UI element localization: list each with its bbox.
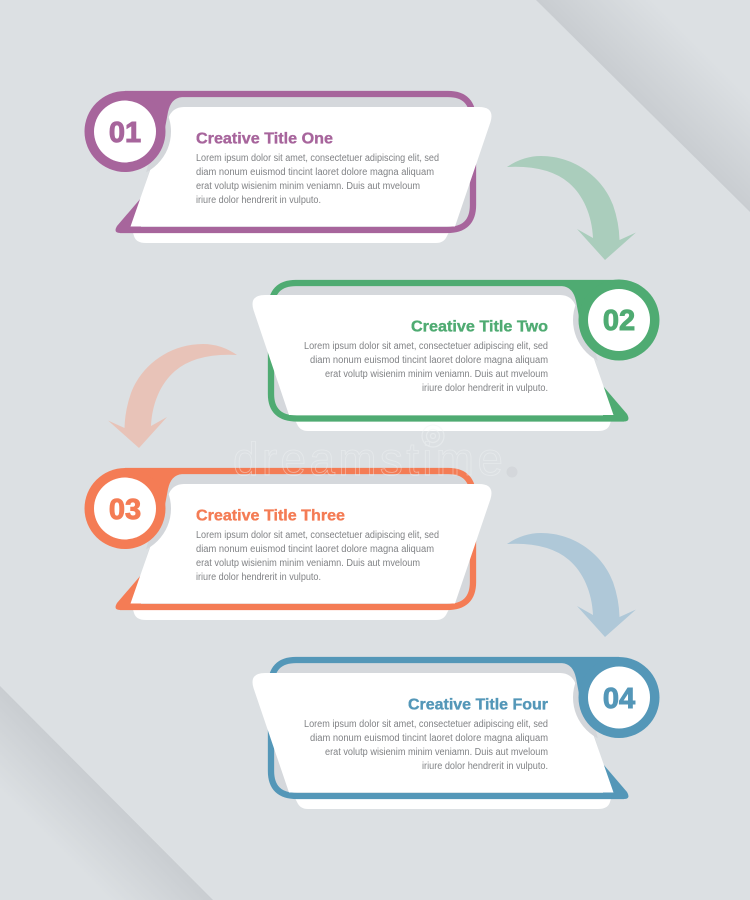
text block: step two: erat volutp wisienim minim veniamn. Duis aut mveloum: [325, 369, 548, 380]
panel: step three: [79, 462, 491, 620]
number 04: 04: [603, 683, 635, 715]
text block: step three: [196, 530, 439, 583]
text block: step one: Lorem ipsum dolor sit amet, consectetuer adipiscing elit, sed: [196, 153, 439, 164]
text block: step four: erat volutp wisienim minim veniamn. Duis aut mveloum: [325, 747, 548, 758]
text block: step four: iriure dolor hendrerit in vulputo.: [422, 761, 548, 772]
text block: step two: iriure dolor hendrerit in vulputo.: [422, 383, 548, 394]
heading: step three: Creative Title Three: [196, 508, 345, 524]
text block: step four: diam nonum euismod tincint laoret dolore magna aliquam: [310, 733, 548, 744]
text block: step two: [304, 341, 548, 394]
arrow: step 1 to 2: [507, 156, 636, 260]
text block: step three: Lorem ipsum dolor sit amet, consectetuer adipiscing elit, sed: [196, 530, 439, 541]
text block: step three: diam nonum euismod tincint laoret dolore magna aliquam: [196, 544, 434, 555]
corner shade: bottom left: [0, 686, 213, 900]
text block: step two: diam nonum euismod tincint laoret dolore magna aliquam: [310, 355, 548, 366]
text block: step two: Lorem ipsum dolor sit amet, consectetuer adipiscing elit, sed: [304, 341, 548, 352]
text block: step one: [196, 153, 439, 206]
text block: step three: erat volutp wisienim minim veniamn. Duis aut mveloum: [196, 558, 420, 569]
heading: step one: Creative Title One: [196, 130, 333, 148]
corner shade: top right: [536, 0, 750, 212]
text block: step three: iriure dolor hendrerit in vulputo.: [196, 572, 321, 583]
number 01: 01: [109, 117, 141, 149]
heading: step four: Creative Title Four: [408, 696, 548, 714]
number 02: 02: [603, 305, 635, 337]
number 03: 03: [109, 494, 141, 526]
arrow: step 3 to 4: [507, 533, 636, 637]
text block: step one: diam nonum euismod tincint laoret dolore magna aliquam: [196, 167, 434, 178]
text block: step one: erat volutp wisienim minim veniamn. Duis aut mveloum: [196, 181, 420, 192]
watermark: dreamstime: [233, 433, 503, 485]
heading: step two: Creative Title Two: [411, 318, 548, 336]
text block: step four: Lorem ipsum dolor sit amet, consectetuer adipiscing elit, sed: [304, 719, 548, 730]
panel: step two: [253, 274, 665, 431]
text block: step four: [304, 719, 548, 772]
arrow: step 2 to 3: [108, 344, 237, 448]
panel: step four: [253, 652, 665, 809]
text block: step one: iriure dolor hendrerit in vulputo.: [196, 195, 321, 206]
panel: step one: [79, 86, 491, 243]
